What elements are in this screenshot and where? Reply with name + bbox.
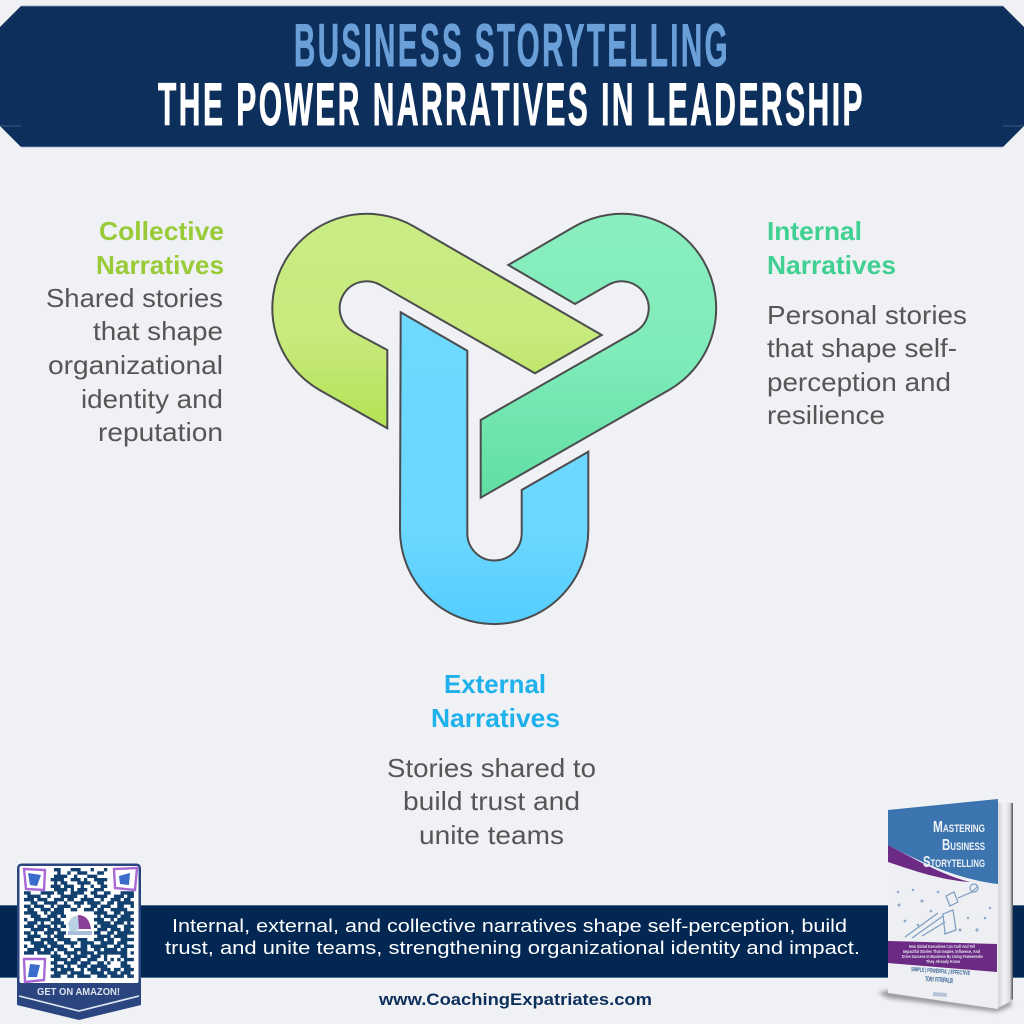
description: external narratives: unite teams — [419, 820, 564, 850]
heading: external narratives: External — [444, 669, 546, 699]
heading: internal narratives: Narratives — [767, 250, 896, 280]
segment: internal (mint) — [481, 214, 716, 498]
book title: BUSINESS — [942, 837, 985, 854]
qr centre logo — [66, 913, 94, 938]
description: collective narratives: reputation — [98, 417, 223, 447]
cover subtitle: How Global Executives Can Craft And Tell — [909, 944, 975, 949]
footer summary text: Internal, external, and collective narratives shape self-perception, build — [172, 915, 847, 936]
heading: external narratives — [431, 669, 560, 733]
cover tagline: SIMPLE | POWERFUL | EFFECTIVE — [911, 967, 970, 977]
description: collective narratives: identity and — [81, 384, 223, 414]
header banner — [0, 6, 1024, 147]
description: external narratives — [387, 753, 596, 850]
heading: collective narratives: Collective — [99, 216, 224, 246]
segment: collective (lime) — [272, 214, 602, 428]
book pages — [996, 803, 1013, 1009]
cover purple swoosh — [888, 845, 970, 882]
description: internal narratives: that shape self- — [767, 333, 957, 363]
qr code badge — [17, 864, 141, 1020]
footer summary text: trust, and unite teams, strengthening organizational identity and impact. — [165, 937, 860, 958]
description: external narratives: build trust and — [403, 786, 580, 816]
description: internal narratives: resilience — [767, 400, 885, 430]
heading: internal narratives: Internal — [767, 216, 862, 246]
book shadow — [878, 990, 1012, 1012]
segment: external (blue) — [400, 312, 588, 624]
website url: www.CoachingExpatriates.com — [378, 990, 652, 1009]
cover blue panel — [888, 799, 998, 884]
cover subtitle: Drive Success In Business By Using Frameworks — [902, 954, 984, 959]
badge chevron line — [19, 996, 139, 1011]
description: collective narratives: that shape — [93, 316, 223, 346]
description: internal narratives: perception and — [767, 367, 951, 397]
cover subtitle: Impactful Stories That Inspire, Influence, And — [903, 949, 980, 954]
heading: collective narratives — [96, 216, 224, 280]
text block: external narratives — [387, 669, 596, 850]
book title: STORYTELLING — [923, 854, 985, 871]
front cover paper — [888, 799, 998, 1009]
heading: external narratives: Narratives — [431, 703, 560, 733]
qr finder: bottom left — [24, 959, 45, 982]
heading: collective narratives: Narratives — [96, 250, 224, 280]
footer bar — [0, 905, 1024, 978]
cover purple band — [888, 941, 997, 972]
qr modules — [24, 870, 134, 976]
text block: internal narratives — [767, 216, 967, 430]
book cover mockup — [878, 799, 1013, 1012]
cover subtitle — [902, 944, 984, 964]
description: internal narratives — [767, 300, 967, 430]
qr finder: top left — [24, 869, 45, 890]
description: collective narratives — [46, 283, 223, 447]
qr finder: top right — [114, 868, 137, 890]
heading: internal narratives — [767, 216, 896, 280]
cover subtitle: They Already Know — [926, 959, 961, 964]
footer summary text — [165, 915, 860, 958]
book cover mockup: TONY FITRIPALDI — [925, 976, 953, 985]
book illustration — [897, 884, 991, 938]
cover publisher mark — [933, 992, 947, 997]
description: external narratives: Stories shared to — [387, 753, 596, 783]
description: collective narratives: Shared stories — [46, 283, 223, 313]
description: internal narratives: Personal stories — [767, 300, 967, 330]
text block: collective narratives — [46, 216, 224, 447]
description: collective narratives: organizational — [48, 350, 223, 380]
triangular knot diagram — [272, 214, 716, 624]
get on amazon label: GET ON AMAZON! — [37, 986, 120, 998]
book title: MASTERING — [933, 819, 985, 836]
book title — [923, 819, 985, 871]
